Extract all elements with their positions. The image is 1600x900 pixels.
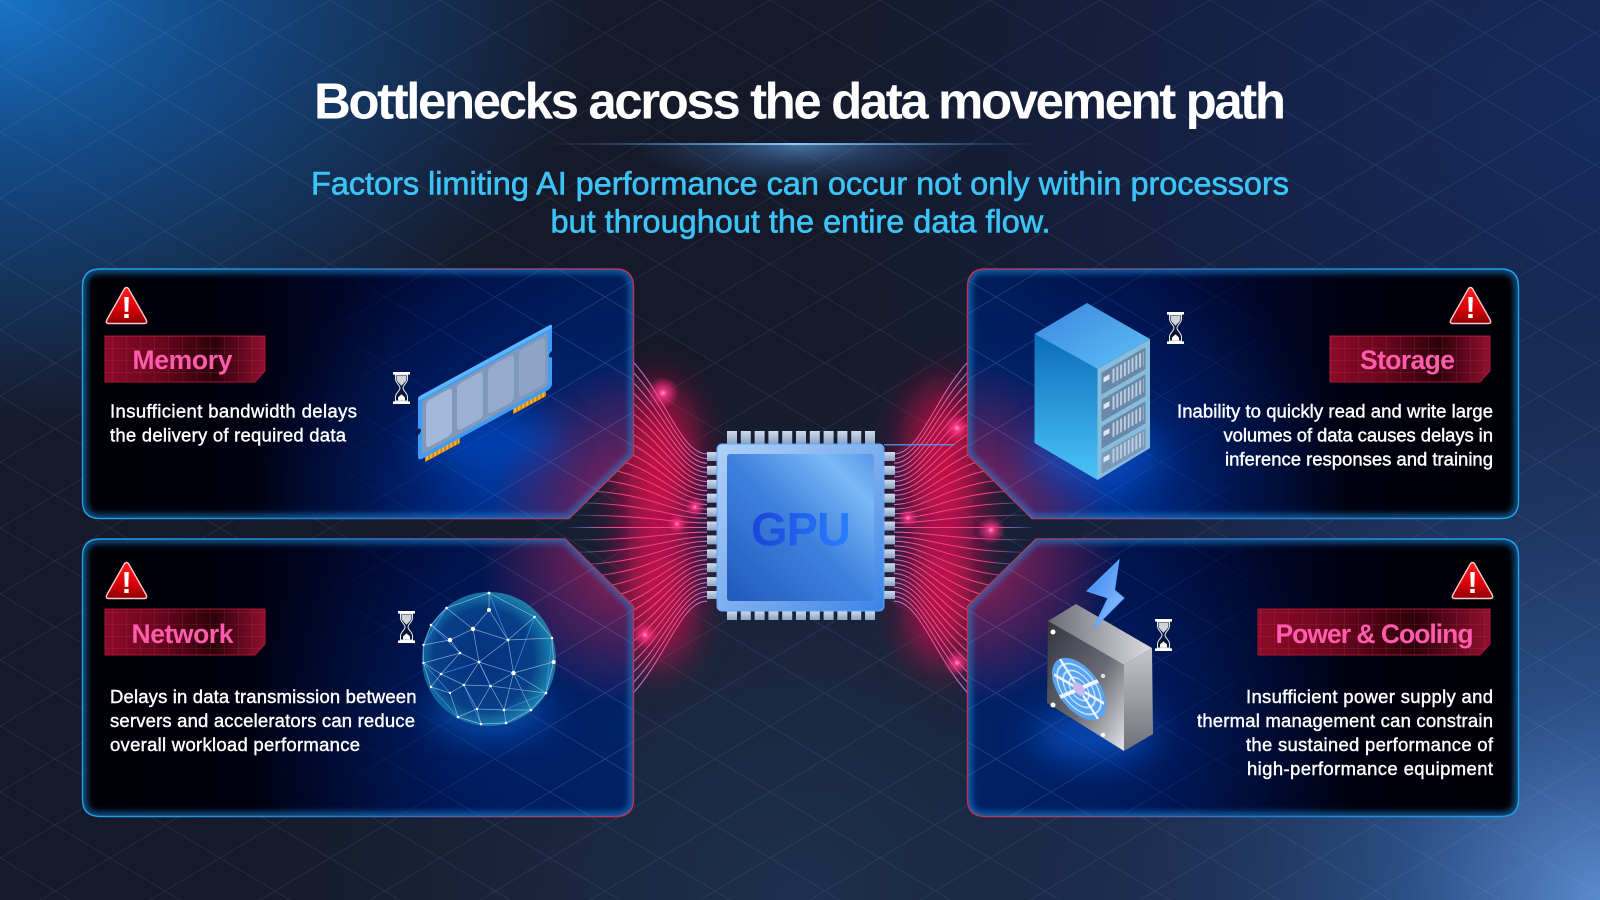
text: memory: Insufficient bandwidth delays	[110, 401, 357, 422]
panel: power and cooling	[967, 539, 1519, 817]
text: network: overall workload performance	[110, 734, 360, 755]
label: memory	[105, 336, 265, 382]
label: storage: Storage	[1360, 345, 1455, 375]
text: storage: inference responses and training	[1225, 449, 1493, 470]
text: storage	[1177, 401, 1493, 470]
icon: alert: !	[1465, 290, 1476, 325]
title: Bottlenecks across the data movement path	[314, 72, 1286, 130]
icon: alert	[106, 288, 147, 325]
icon: alert: !	[121, 565, 132, 600]
text: power and cooling: Insufficient power supply and	[1246, 686, 1493, 707]
panel: network	[82, 539, 634, 817]
label: power and cooling: Power & Cooling	[1276, 619, 1474, 649]
text: power and cooling	[1197, 686, 1494, 779]
icon: hourglass	[393, 372, 410, 404]
chip body	[717, 444, 884, 611]
icon: network globe	[422, 592, 556, 734]
icon: hourglass	[1155, 619, 1172, 651]
text: network: servers and accelerators can reduce	[110, 710, 415, 731]
data flow waves left	[560, 328, 707, 728]
text: power and cooling: high-performance equipment	[1247, 758, 1493, 779]
icon: memory module	[415, 322, 560, 470]
GPU label: GPU	[751, 503, 851, 556]
text: power and cooling: the sustained performance of	[1246, 734, 1494, 755]
text: storage: volumes of data causes delays in	[1224, 425, 1493, 446]
chip pins	[707, 431, 895, 620]
label: storage	[1330, 336, 1490, 382]
subtitle: Factors limiting AI performance can occur not only within processors	[311, 166, 1289, 202]
icon: alert: !	[121, 290, 132, 325]
icon: hourglass	[1167, 312, 1184, 344]
divider with glow	[556, 143, 1030, 184]
label: power and cooling	[1258, 609, 1490, 655]
text: network	[110, 686, 416, 755]
icon: alert	[106, 562, 147, 600]
text: power and cooling: thermal management can constrain	[1197, 710, 1493, 731]
GPU chip	[707, 431, 895, 620]
text: memory: the delivery of required data	[110, 425, 347, 446]
glow points left	[632, 377, 705, 648]
chip face	[727, 454, 874, 601]
panel: storage	[967, 269, 1519, 519]
icon: lightning bolt	[1087, 560, 1124, 629]
label: memory: Memory	[132, 345, 233, 375]
icon: hourglass	[398, 611, 415, 643]
text: network: Delays in data transmission between	[110, 686, 416, 707]
label: network	[105, 609, 265, 655]
icon: alert	[1452, 562, 1493, 600]
icon: power supply fan	[1033, 560, 1157, 759]
text: storage: Inability to quickly read and write large	[1177, 401, 1493, 422]
subtitle	[311, 166, 1289, 240]
data flow waves right	[884, 328, 1041, 728]
icon: alert: !	[1467, 565, 1478, 600]
panel: memory	[82, 269, 634, 519]
glow points right	[898, 414, 1005, 676]
label: network: Network	[132, 619, 234, 649]
icon: server rack	[1030, 303, 1160, 485]
text: memory	[110, 401, 357, 446]
icon: alert	[1450, 288, 1491, 325]
subtitle: but throughout the entire data flow.	[550, 204, 1050, 240]
